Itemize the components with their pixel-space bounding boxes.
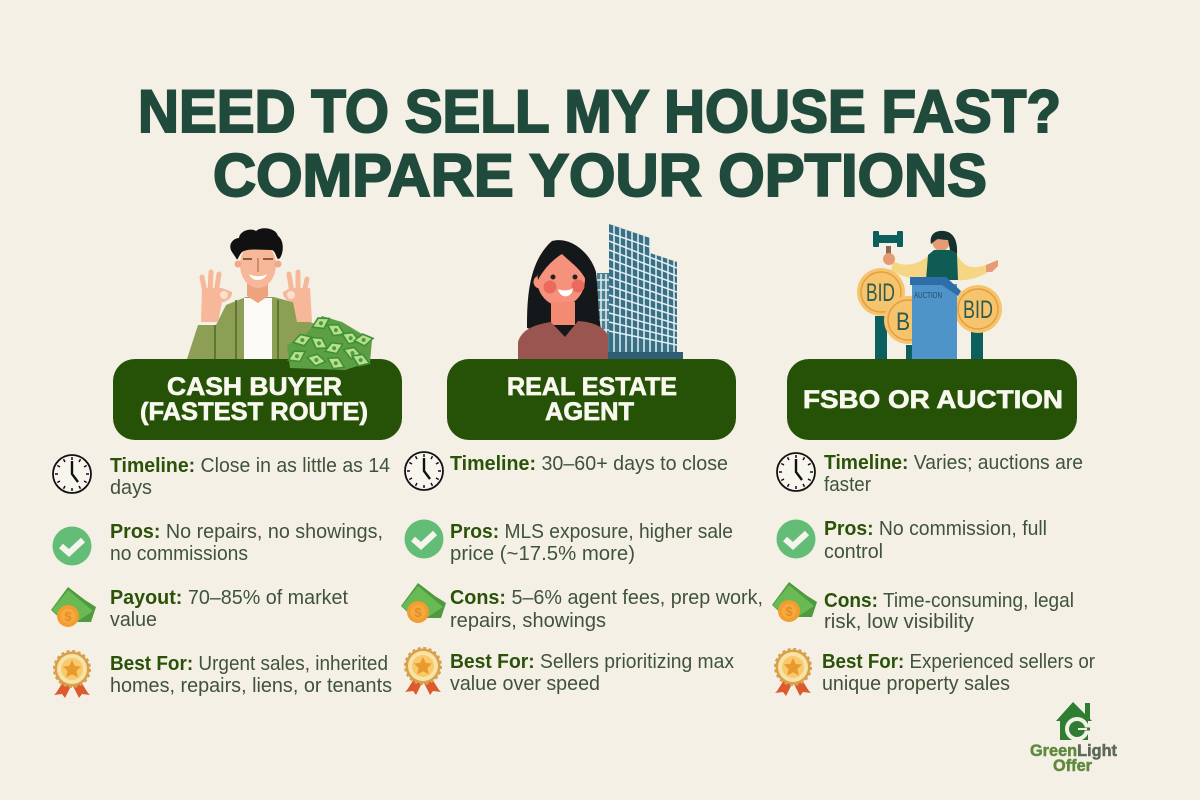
icon: check mark xyxy=(52,526,92,566)
text: best for: unique property sales xyxy=(822,672,1010,695)
illustration: cash buyer xyxy=(187,228,324,359)
text: pros: Pros: No repairs, no showings, xyxy=(110,520,383,543)
text: best for: homes, repairs, liens, or tenants xyxy=(110,674,392,697)
title xyxy=(138,78,1061,209)
text: pros xyxy=(450,520,733,565)
text: timeline: Timeline: 30–60+ days to close xyxy=(450,452,728,475)
icon: check mark xyxy=(404,520,444,558)
icon: medal xyxy=(54,652,90,698)
text: pros: price (~17.5% more) xyxy=(450,542,635,565)
panel: real estate agent heading: AGENT xyxy=(545,398,634,426)
text: pros: no commissions xyxy=(110,542,248,565)
icon: money xyxy=(772,582,817,622)
logo: GreenLight Offer: Offer xyxy=(1053,756,1092,775)
illustration: auction podium with bid signs: AUCTION xyxy=(914,290,942,300)
illustration: auction podium with bid signs: BI xyxy=(896,308,916,336)
text: payout xyxy=(110,586,348,631)
text: cons xyxy=(824,589,1074,633)
text: best for: value over speed xyxy=(450,672,600,695)
text: pros: Pros: MLS exposure, higher sale xyxy=(450,520,733,543)
text: best for xyxy=(822,650,1095,695)
text: best for: Best For: Urgent sales, inherited xyxy=(110,652,388,675)
illustration: auction podium with bid signs: BID xyxy=(866,279,895,307)
text: timeline xyxy=(110,454,390,499)
panel: FSBO or auction heading xyxy=(787,359,1077,440)
text: cons: risk, low visibility xyxy=(824,610,975,633)
text: timeline: days xyxy=(110,476,152,499)
text: best for xyxy=(450,650,735,695)
panel: real estate agent heading: REAL ESTATE xyxy=(507,373,677,401)
title: COMPARE YOUR OPTIONS xyxy=(213,142,987,209)
panel: real estate agent heading xyxy=(447,359,736,440)
icon: medal xyxy=(775,650,811,696)
panel: FSBO or auction heading: FSBO OR AUCTION xyxy=(803,386,1063,414)
panel: cash buyer details xyxy=(51,454,392,698)
illustration: auction podium with bid signs: BID xyxy=(963,296,993,324)
icon: money xyxy=(401,583,446,623)
illustration: auction podium with bid signs xyxy=(857,231,1002,359)
text: pros xyxy=(824,517,1047,563)
text: cons: Cons: Time-consuming, legal xyxy=(824,589,1074,612)
illustration: money pile xyxy=(284,312,376,374)
text: timeline: Timeline: Close in as little as 14 xyxy=(110,454,390,477)
text: cons: repairs, showings xyxy=(450,609,606,632)
title: NEED TO SELL MY HOUSE FAST? xyxy=(138,78,1061,145)
text: cons xyxy=(450,586,763,632)
text: best for: Best For: Sellers prioritizing max xyxy=(450,650,735,673)
logo: GreenLight Offer: GreenLight xyxy=(1030,742,1117,760)
text: cons: Cons: 5–6% agent fees, prep work, xyxy=(450,586,763,609)
text: best for xyxy=(110,652,392,697)
text: pros: control xyxy=(824,540,883,563)
text: timeline: faster xyxy=(824,473,871,496)
text: timeline: Timeline: Varies; auctions are xyxy=(824,451,1083,474)
icon: clock xyxy=(405,452,443,490)
panel: real estate agent details xyxy=(401,452,763,695)
logo: GreenLight Offer xyxy=(1030,702,1117,775)
panel: cash buyer heading: CASH BUYER xyxy=(167,373,342,401)
panel: FSBO or auction details xyxy=(772,451,1095,696)
text: timeline xyxy=(824,451,1083,496)
icon: medal xyxy=(405,648,441,695)
text: payout: Payout: 70–85% of market xyxy=(110,586,348,609)
icon: money xyxy=(51,587,96,627)
panel: cash buyer heading xyxy=(113,359,402,440)
icon: check mark xyxy=(776,520,816,558)
text: payout: value xyxy=(110,608,157,631)
illustration: real estate agent and tower xyxy=(518,224,683,360)
text: best for: Best For: Experienced sellers or xyxy=(822,650,1095,673)
icon: clock xyxy=(777,453,815,491)
text: pros: Pros: No commission, full xyxy=(824,517,1047,540)
icon: clock xyxy=(53,455,91,493)
panel: cash buyer heading: (FASTEST ROUTE) xyxy=(140,398,368,426)
text: pros xyxy=(110,520,383,565)
